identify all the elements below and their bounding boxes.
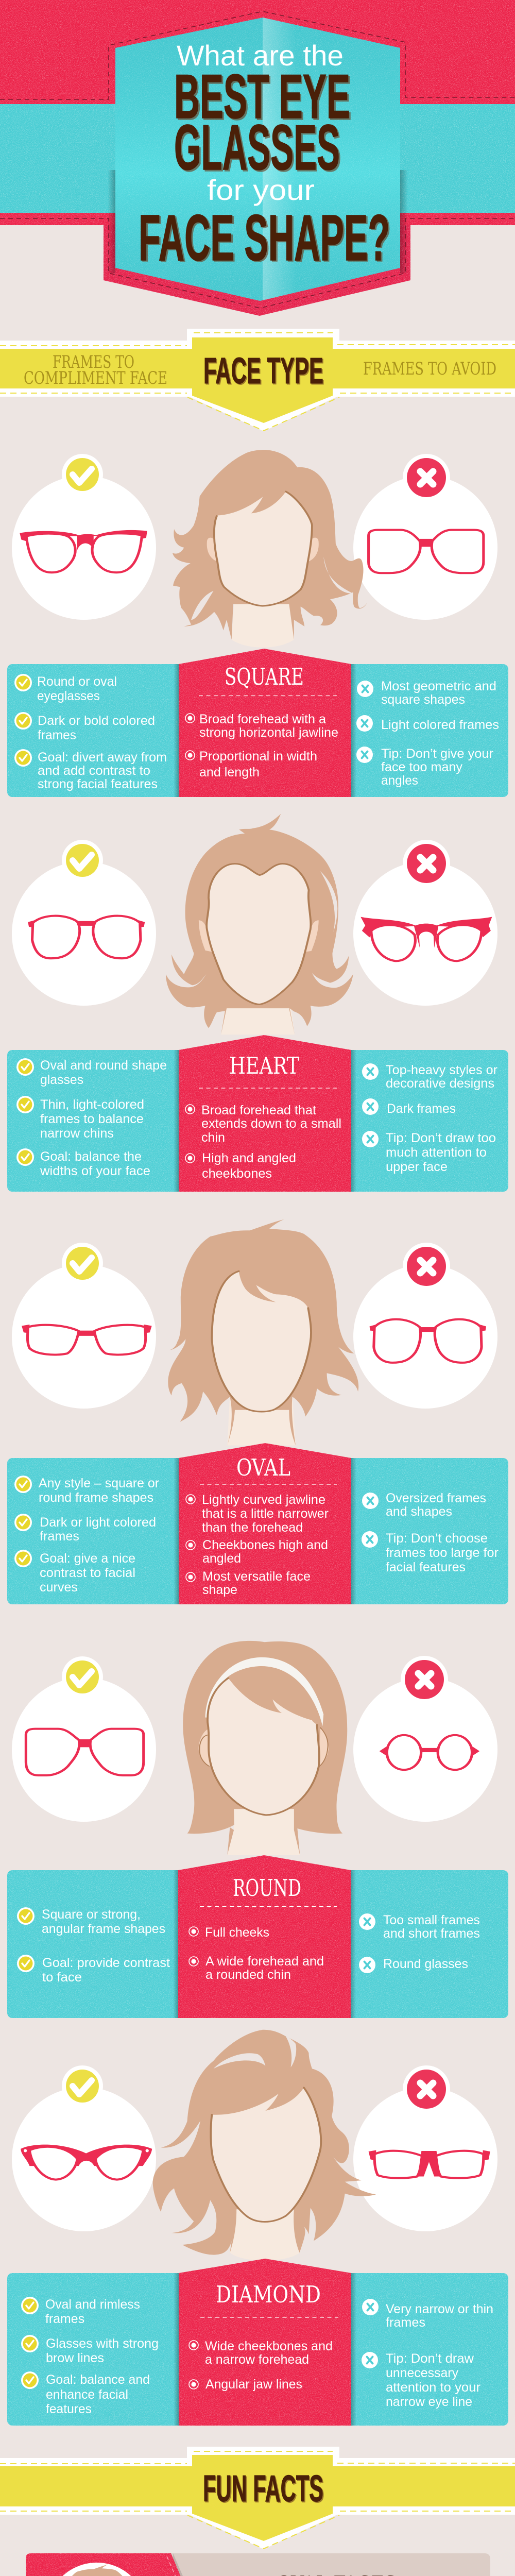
good frame circle — [12, 454, 156, 620]
list: frames to avoid: face too many — [381, 760, 463, 774]
list: frames to avoid — [356, 679, 499, 788]
list: frames to choose: contrast to facial — [40, 1566, 135, 1580]
list: face traits: chin — [201, 1130, 225, 1145]
list: frames to choose: Thin, light-colored — [40, 1097, 144, 1112]
list: frames to choose: frames — [40, 1529, 79, 1544]
panel: round details — [7, 1855, 508, 2018]
heading: fun facts: FUN FACTS — [204, 2469, 324, 2511]
list: frames to choose: narrow chins — [40, 1126, 114, 1141]
list: frames to avoid: Dark frames — [387, 1101, 456, 1116]
panel: diamond details — [7, 2259, 508, 2426]
title text: BEST EYE — [176, 63, 352, 133]
list: face traits: Broad forehead with a — [199, 712, 326, 726]
list: frames to choose: Round or oval — [37, 674, 117, 689]
section: heart face — [7, 814, 508, 1192]
list: frames to choose: Any style – square or — [39, 1476, 159, 1490]
list: frames to avoid: Too small frames — [383, 1913, 480, 1927]
title text: BEST EYE — [174, 61, 350, 131]
list: frames to avoid — [362, 1063, 497, 1174]
list: frames to choose: Dark or bold colored — [38, 714, 155, 728]
list: frames to choose: Glasses with strong — [46, 2336, 159, 2351]
list: face traits: strong horizontal jawline — [199, 725, 338, 740]
section: diamond face — [7, 2030, 508, 2426]
glasses: recommended angular frames — [26, 1729, 144, 1775]
heading: heart: HEART — [229, 1052, 299, 1079]
list: face traits: than the forehead — [202, 1520, 303, 1535]
list: frames to avoid: Tip: Don’t draw — [386, 2351, 474, 2366]
list: frames to avoid: narrow eye line — [386, 2395, 472, 2409]
title text: GLASSES — [176, 114, 341, 185]
list: frames to choose: Goal: balance the — [40, 1149, 142, 1164]
list: frames to avoid — [359, 1913, 480, 1973]
list: face traits: Lightly curved jawline — [202, 1493, 325, 1507]
list: frames to choose: features — [46, 2402, 92, 2416]
list: frames to choose: glasses — [40, 1073, 83, 1087]
title header — [0, 0, 515, 316]
list: face traits: extends down to a small — [201, 1116, 341, 1131]
list: face traits — [185, 1103, 341, 1181]
heading: square: SQUARE — [225, 663, 304, 690]
title text — [139, 39, 391, 275]
label: frames to compliment face: FRAMES TO — [53, 352, 134, 372]
list: face traits: Full cheeks — [205, 1925, 269, 1940]
section: oval face — [7, 1219, 508, 1604]
list: face traits — [185, 712, 338, 779]
list: frames to choose: Square or strong, — [42, 1907, 141, 1922]
list: frames to avoid — [362, 2299, 493, 2409]
good frame circle — [12, 1243, 156, 1409]
list: frames to avoid — [362, 1491, 499, 1574]
list: face traits: that is a little narrower — [202, 1506, 329, 1521]
portrait: oval — [63, 2563, 131, 2576]
list: frames to avoid: attention to your — [386, 2380, 480, 2395]
list: frames to avoid: frames — [386, 2315, 425, 2330]
list: frames to avoid: Tip: Don’t choose — [386, 1531, 488, 1546]
list: frames to choose: Oval and rimless — [45, 2297, 140, 2312]
list: frames to avoid: and shapes — [386, 1504, 452, 1519]
list: frames to choose: Goal: provide contrast — [42, 1956, 170, 1970]
list: frames to avoid: Very narrow or thin — [386, 2302, 493, 2316]
label: frames to compliment face — [24, 352, 167, 388]
heading: fun facts — [203, 2468, 324, 2511]
list: frames to choose: Goal: give a nice — [40, 1551, 135, 1566]
face type ribbon — [0, 329, 515, 431]
list: frames to avoid: much attention to — [386, 1145, 487, 1160]
heading: oval: OVAL — [236, 1454, 290, 1481]
list: frames to choose — [14, 1476, 159, 1595]
list: face traits — [189, 1925, 324, 1982]
label: frames to compliment face: COMPLIMENT FACE — [24, 368, 167, 388]
avoid frame circle — [353, 2065, 497, 2231]
oval face illustration — [168, 1219, 358, 1446]
list: face traits: angled — [202, 1551, 241, 1566]
avoid frame circle — [353, 454, 497, 620]
avoid frame circle — [353, 840, 497, 1006]
heading: round: ROUND — [233, 1874, 301, 1902]
glasses: frames to avoid, oversized — [370, 1319, 486, 1363]
list: frames to choose: Goal: divert away from — [38, 750, 167, 765]
list: frames to avoid: Light colored frames — [381, 718, 499, 732]
list: frames to avoid: Round glasses — [383, 1957, 468, 1971]
list: frames to avoid: square shapes — [381, 692, 465, 707]
list: frames to avoid: Tip: Don’t draw too — [386, 1131, 496, 1145]
list: frames to choose: brow lines — [46, 2351, 104, 2365]
list: frames to avoid: angles — [381, 773, 418, 788]
avoid frame circle — [353, 1243, 497, 1409]
list: frames to choose: Goal: balance and — [46, 2372, 150, 2387]
list: frames to choose: and add contrast to — [38, 764, 150, 778]
list: frames to choose: angular frame shapes — [42, 1922, 165, 1936]
list: frames to choose — [14, 674, 167, 791]
list: frames to avoid: upper face — [386, 1160, 448, 1174]
list: frames to avoid: Oversized frames — [386, 1491, 486, 1505]
list: frames to choose: frames — [38, 728, 76, 742]
list: frames to avoid: Top-heavy styles or — [386, 1063, 497, 1077]
list: face traits: Most versatile face — [202, 1569, 311, 1584]
list: face traits: Broad forehead that — [201, 1103, 316, 1117]
glasses: frames to avoid, small round — [380, 1735, 479, 1770]
list: frames to avoid: decorative designs — [386, 1076, 494, 1091]
list: face traits — [189, 2339, 333, 2392]
square face illustration — [173, 450, 367, 648]
list: frames to choose — [16, 1058, 167, 1178]
list: face traits: a narrow forehead — [205, 2352, 309, 2367]
list: frames to choose: to face — [42, 1970, 82, 1985]
list: frames to choose: widths of your face — [40, 1164, 150, 1178]
list: frames to choose: Dark or light colored — [40, 1515, 156, 1530]
list: frames to choose: curves — [40, 1580, 78, 1595]
list: face traits: Angular jaw lines — [205, 2377, 302, 2392]
list: frames to avoid: Tip: Don’t give your — [381, 747, 493, 761]
card: oval faces — [26, 2553, 490, 2576]
glasses: frames to avoid, square — [369, 530, 484, 573]
list: face traits: Cheekbones high and — [202, 1538, 328, 1552]
list: face traits: High and angled — [202, 1151, 296, 1165]
good frame circle — [12, 840, 156, 1006]
section: round face — [7, 1641, 508, 2018]
glasses: recommended round frames — [20, 530, 147, 572]
avoid frame circle — [353, 1656, 497, 1822]
list: frames to avoid: facial features — [386, 1560, 466, 1574]
panel: oval details — [7, 1443, 508, 1604]
heart face illustration — [166, 814, 353, 1035]
list: frames to choose: frames — [45, 2312, 84, 2326]
fun facts ribbon — [0, 2447, 515, 2549]
good frame circle — [12, 1656, 156, 1822]
glasses: frames to avoid, decorative — [360, 917, 492, 961]
list: face traits: shape — [202, 1583, 237, 1597]
list: frames to choose — [17, 1907, 170, 1985]
list: frames to choose: round frame shapes — [39, 1490, 153, 1505]
section: square face — [7, 450, 508, 797]
title text: GLASSES — [174, 112, 340, 183]
label: face type — [203, 351, 324, 393]
list: frames to choose: Oval and round shape — [40, 1058, 167, 1073]
list: face traits — [186, 1493, 329, 1597]
list: frames to choose — [21, 2297, 159, 2416]
list: frames to avoid: Most geometric and — [381, 679, 496, 693]
list: frames to choose: enhance facial — [46, 2387, 128, 2402]
label: face type: FACE TYPE — [204, 352, 324, 393]
panel: square details — [7, 649, 508, 797]
glasses: recommended rectangular frames — [22, 1325, 152, 1355]
title text: What are the — [177, 39, 344, 72]
list: face traits: cheekbones — [202, 1166, 272, 1181]
list: face traits: Proportional in width — [199, 749, 317, 764]
list: frames to choose: eyeglasses — [37, 689, 100, 703]
list: face traits: Wide cheekbones and — [205, 2339, 333, 2353]
list: frames to choose: frames to balance — [40, 1112, 144, 1126]
glasses: frames to avoid, narrow — [369, 2150, 490, 2178]
list: face traits: and length — [199, 765, 260, 779]
list: frames to avoid: and short frames — [383, 1926, 480, 1941]
list: frames to avoid: unnecessary — [386, 2366, 458, 2380]
panel: heart details — [7, 1035, 508, 1192]
good frame circle — [12, 2065, 156, 2231]
glasses: recommended cat-eye frames — [21, 2145, 152, 2180]
list: frames to avoid: frames too large for — [386, 1546, 499, 1560]
list: frames to choose: strong facial features — [38, 777, 158, 791]
list: face traits: A wide forehead and — [205, 1954, 324, 1969]
title text: for your — [207, 174, 315, 206]
heading: diamond: DIAMOND — [216, 2281, 321, 2308]
round face illustration — [183, 1641, 347, 1855]
list: face traits: a rounded chin — [205, 1968, 291, 1982]
label: face type: FACE TYPE — [203, 351, 323, 392]
diamond face illustration — [153, 2030, 376, 2261]
heading: fun facts: FUN FACTS — [203, 2468, 323, 2510]
glasses: recommended round frames — [28, 916, 145, 958]
